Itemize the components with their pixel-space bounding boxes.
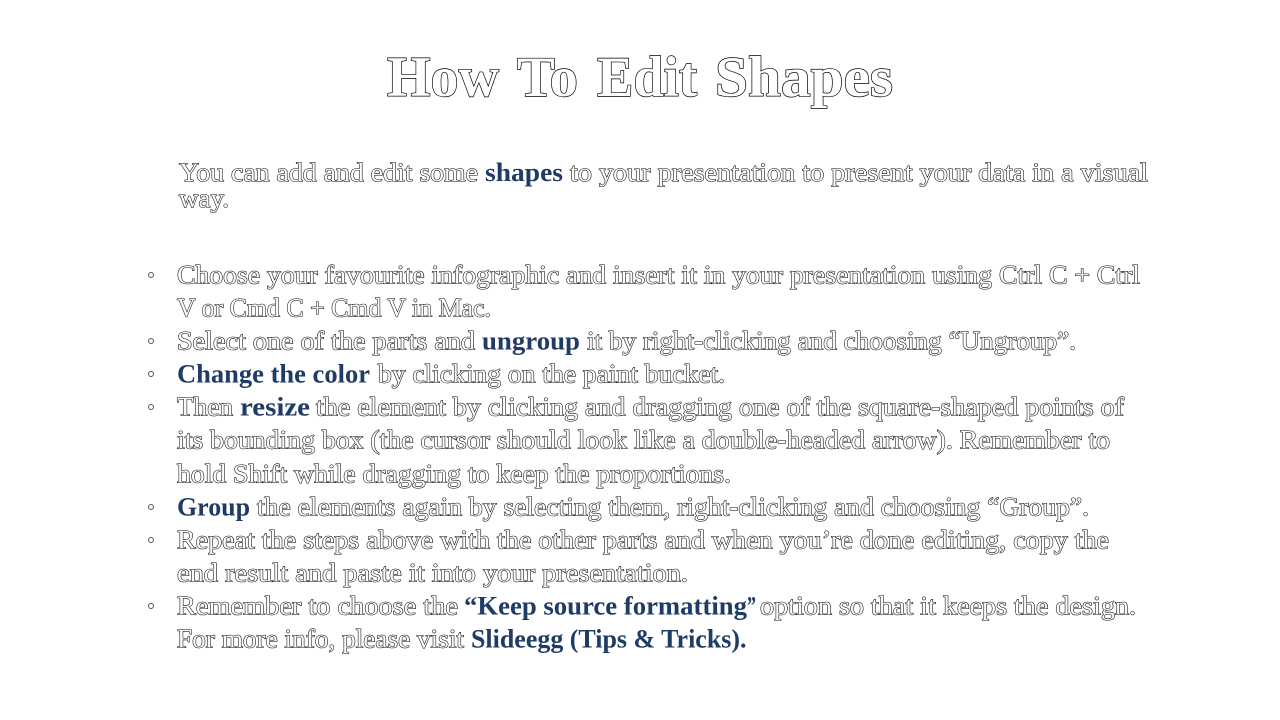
title: Shapes: [715, 46, 893, 109]
title: Edit: [597, 46, 697, 109]
step: keep source formatting: ”: [747, 592, 756, 620]
step: change the color: [148, 360, 725, 388]
intro paragraph: shapes: [485, 158, 563, 187]
step: resize: its bounding box (the cursor should look like a double-headed arrow). Remember to: [177, 426, 1110, 454]
intro paragraph: You can add and edit some: [179, 158, 478, 187]
step: ungroup: ungroup: [482, 326, 580, 356]
intro paragraph: [179, 158, 1148, 213]
step: choose infographic: V or Cmd C + Cmd V in Mac.: [177, 294, 491, 322]
step: repeat: Repeat the steps above with the other parts and when you’re done editing, copy the: [177, 526, 1109, 554]
bullet list: [148, 260, 1140, 654]
step: resize: [148, 392, 1124, 488]
step: resize: the element by clicking and dragging one of the square-shaped points of: [316, 392, 1124, 422]
step: repeat: [148, 526, 1109, 588]
step: keep source formatting: Slideegg (Tips & Tricks): [471, 624, 740, 654]
step: resize: Then: [177, 392, 233, 422]
step: choose infographic: Choose your favourite infographic and insert it in your presentation using Ctrl C + Ctrl: [177, 260, 1140, 290]
step: ungroup: [148, 326, 1076, 356]
step: change the color: Change the color: [177, 360, 370, 388]
step: keep source formatting: option so that it keeps the design.: [760, 592, 1136, 620]
step: group: Group: [177, 492, 250, 522]
step: group: the elements again by selecting them, right-clicking and choosing “Group”.: [257, 492, 1089, 522]
step: keep source formatting: .: [740, 624, 746, 654]
step: repeat: end result and paste it into your presentation.: [177, 558, 688, 588]
step: resize: hold Shift while dragging to keep the proportions.: [177, 460, 731, 488]
step: resize: resize: [240, 392, 310, 422]
title: To: [517, 46, 578, 109]
step: change the color: by clicking on the paint bucket.: [378, 360, 725, 388]
step: choose infographic: [148, 260, 1140, 322]
step: keep source formatting: [148, 592, 1136, 654]
step: ungroup: it by right-clicking and choosing “Ungroup”.: [587, 326, 1076, 356]
title: How: [387, 46, 499, 109]
step: keep source formatting: “Keep source formatting: [464, 592, 747, 620]
intro paragraph: to your presentation to present your data in a visual: [570, 158, 1148, 187]
step: keep source formatting: Remember to choose the: [177, 592, 458, 620]
title: [387, 46, 893, 109]
step: ungroup: Select one of the parts and: [177, 326, 475, 356]
step: keep source formatting: For more info, please visit: [177, 624, 465, 654]
intro paragraph: way.: [179, 184, 229, 213]
